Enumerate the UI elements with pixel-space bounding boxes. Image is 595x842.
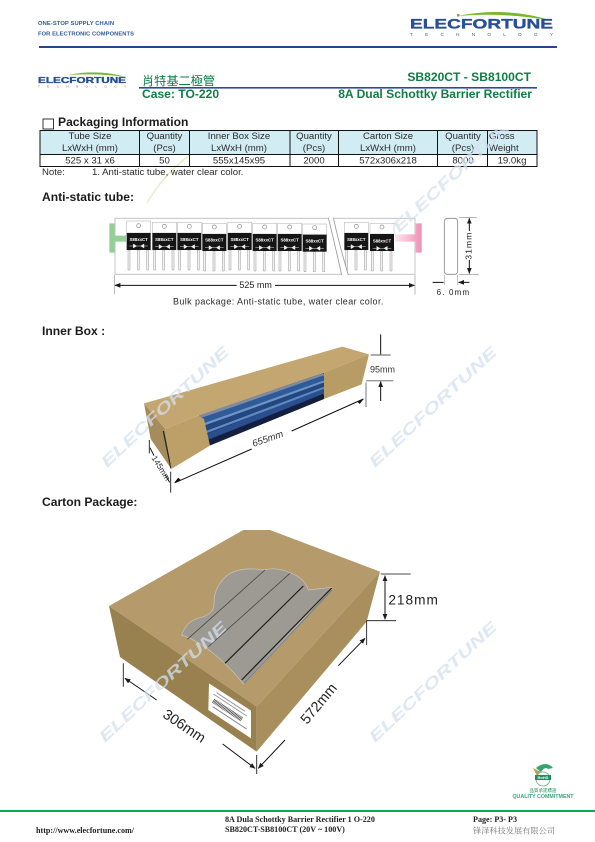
transistor 7: S88xxCT xyxy=(281,238,299,243)
footer url: http://www.elecfortune.com/ xyxy=(36,826,135,835)
inner box illustration xyxy=(144,334,395,493)
transistor 1 xyxy=(127,221,151,250)
packaging table: Quantity xyxy=(296,131,332,142)
icon: RoHS quality commitment: QUALITY COMMITMENT xyxy=(512,794,574,800)
transistor 9: S88xxCT xyxy=(347,237,366,242)
icon: RoHS quality commitment: 品質承諾標語 xyxy=(530,787,557,794)
packaging table: Tube Size xyxy=(69,131,111,142)
faint swoosh xyxy=(147,153,193,203)
transistor 5 xyxy=(228,222,252,250)
dimension: 6.0mm xyxy=(433,275,470,297)
packaging table: Quantity xyxy=(445,131,481,142)
dimension: 572mm xyxy=(258,638,365,768)
tube body xyxy=(115,218,415,274)
transistor 9 xyxy=(344,222,368,250)
packaging table: Inner Box Size xyxy=(208,131,270,142)
transistor 6: S88xxCT xyxy=(256,238,274,243)
transistor 3: S88xxCT xyxy=(180,237,199,242)
heading: carton package: Carton Package: xyxy=(42,495,137,509)
packaging table: LxWxH (mm) xyxy=(62,143,118,154)
heading: packaging information: Packaging Information xyxy=(58,115,188,129)
packaging table: (Pcs) xyxy=(153,143,176,154)
transistor 8 xyxy=(303,224,327,252)
dimension: 31mm xyxy=(459,217,479,274)
header tagline: FOR ELECTRONIC COMPONENTS xyxy=(38,32,134,38)
transistor 6 xyxy=(253,223,277,251)
header tagline: ONE-STOP SUPPLY CHAIN xyxy=(38,21,114,27)
transistor 2 xyxy=(152,222,176,250)
packaging table: 8000 xyxy=(452,156,474,166)
packaging table: (Pcs) xyxy=(303,143,325,154)
product type chinese: 肖特基二極管 xyxy=(142,73,215,88)
dimension: 145mm xyxy=(149,440,173,493)
watermarks: ELECFORTUNE xyxy=(96,618,231,746)
dimension: 218mm xyxy=(367,574,439,645)
transistor 3 xyxy=(177,222,201,250)
logo: Elecfortune header: ELECFORTUNE xyxy=(410,16,553,32)
carton right face xyxy=(257,572,380,752)
packaging table: 50 xyxy=(159,156,170,166)
watermarks xyxy=(96,108,525,746)
carton left face xyxy=(109,606,257,752)
transistor 2: S88xxCT xyxy=(155,237,174,242)
transistor 10: S88xxCT xyxy=(373,238,391,243)
watermarks: ELECFORTUNE xyxy=(366,343,501,471)
logo: Elecfortune header xyxy=(410,12,553,37)
logo: Elecfortune small: ELECFORTUNE xyxy=(38,75,127,85)
dimension: 306mm xyxy=(123,663,257,774)
footer product xyxy=(225,815,375,834)
watermarks: ELECFORTUNE xyxy=(366,618,501,746)
logo: Elecfortune small: TECHNOLOGY xyxy=(38,84,126,88)
end cap green xyxy=(109,223,126,253)
footer page and company xyxy=(473,815,555,836)
packaging table: Gross xyxy=(489,131,515,142)
transistor 8: S88xxCT xyxy=(306,238,324,243)
box top flap xyxy=(144,347,369,429)
box window with blue tubes xyxy=(198,373,324,446)
packaging table: 572x306x218 xyxy=(359,156,417,166)
dimension: 218mm: 218mm xyxy=(388,592,439,607)
caption: Bulk package: Anti-static tube, water clear color. xyxy=(173,296,384,306)
transistor 10 xyxy=(370,223,394,251)
watermarks: ELECFORTUNE xyxy=(98,343,233,471)
transistor 4: S88xxCT xyxy=(205,238,224,243)
footer product: 8A Dula Schottky Barrier Rectifier 1 O-220 xyxy=(225,815,375,824)
packaging table: Weight xyxy=(489,143,519,154)
packaging table: 525 x 31 x6 xyxy=(65,156,115,166)
logo: Elecfortune header: TECHNOLOGY xyxy=(410,32,553,37)
case: Case: TO-220 xyxy=(142,87,219,101)
carton illustration xyxy=(109,530,439,774)
packaging table: 555x145x95 xyxy=(213,156,265,166)
dimension: 306mm: 306mm xyxy=(160,707,208,747)
packaging table: Quantity xyxy=(147,131,183,142)
packaging table: 2000 xyxy=(303,156,325,166)
carton opening with tubes xyxy=(182,569,332,684)
packaging table: LxWxH (mm) xyxy=(211,143,267,154)
dimension: 6.0mm: 6. 0mm xyxy=(437,288,470,297)
tube diagram xyxy=(109,217,479,306)
dimension: 525 mm: 525 mm xyxy=(239,280,272,290)
dimension: 95mm: 95mm xyxy=(370,364,395,374)
dimension: 31mm: 31mm xyxy=(464,232,474,260)
heading: inner box: Inner Box : xyxy=(42,324,105,338)
packaging table: (Pcs) xyxy=(452,143,474,154)
dimension: 655mm: 655mm xyxy=(251,429,285,450)
dimension: 655mm xyxy=(174,399,364,483)
note: 1. Anti-static tube, water clear color. xyxy=(92,167,243,178)
carton top xyxy=(109,530,380,707)
box right panel xyxy=(324,354,369,399)
icon: RoHS quality commitment: RoHS xyxy=(538,775,549,780)
box front panel xyxy=(165,416,210,469)
box left end xyxy=(144,403,171,469)
carton label xyxy=(208,683,251,738)
header tagline xyxy=(38,21,134,38)
watermarks: ELECFORTUNE xyxy=(390,108,525,236)
transistor 1: S88xxCT xyxy=(130,237,148,242)
note: Note: xyxy=(42,167,65,178)
product description: 8A Dual Schottky Barrier Rectifier xyxy=(338,87,532,101)
dimension: 525 mm xyxy=(114,275,415,294)
part numbers: SB820CT - SB8100CT xyxy=(407,70,532,84)
dimension: 572mm: 572mm xyxy=(298,681,341,728)
packaging table: LxWxH (mm) xyxy=(360,143,416,154)
footer page and company: 锋泽科技发展有限公司 xyxy=(473,826,555,836)
transistor leads xyxy=(128,250,392,272)
packaging table: 19.0kg xyxy=(498,156,526,166)
logo: Elecfortune small xyxy=(38,72,127,88)
transistor 4 xyxy=(202,223,226,251)
packaging table xyxy=(40,130,537,166)
tube cross-section xyxy=(444,218,458,274)
icon: RoHS quality commitment xyxy=(512,764,574,800)
dimension: 145mm: 145mm xyxy=(150,454,173,483)
dimension: 95mm xyxy=(366,334,395,407)
heading: anti-static tube: Anti-static tube: xyxy=(42,190,134,204)
tube break xyxy=(328,218,348,275)
transistor 5: S88xxCT xyxy=(231,237,249,242)
footer page and company: Page: P3- P3 xyxy=(473,815,517,824)
packaging table: Carton Size xyxy=(363,131,413,142)
transistor 7 xyxy=(278,223,302,251)
end cap pink xyxy=(395,223,422,253)
footer product: SB820CT-SB8100CT (20V ~ 100V) xyxy=(225,825,345,834)
